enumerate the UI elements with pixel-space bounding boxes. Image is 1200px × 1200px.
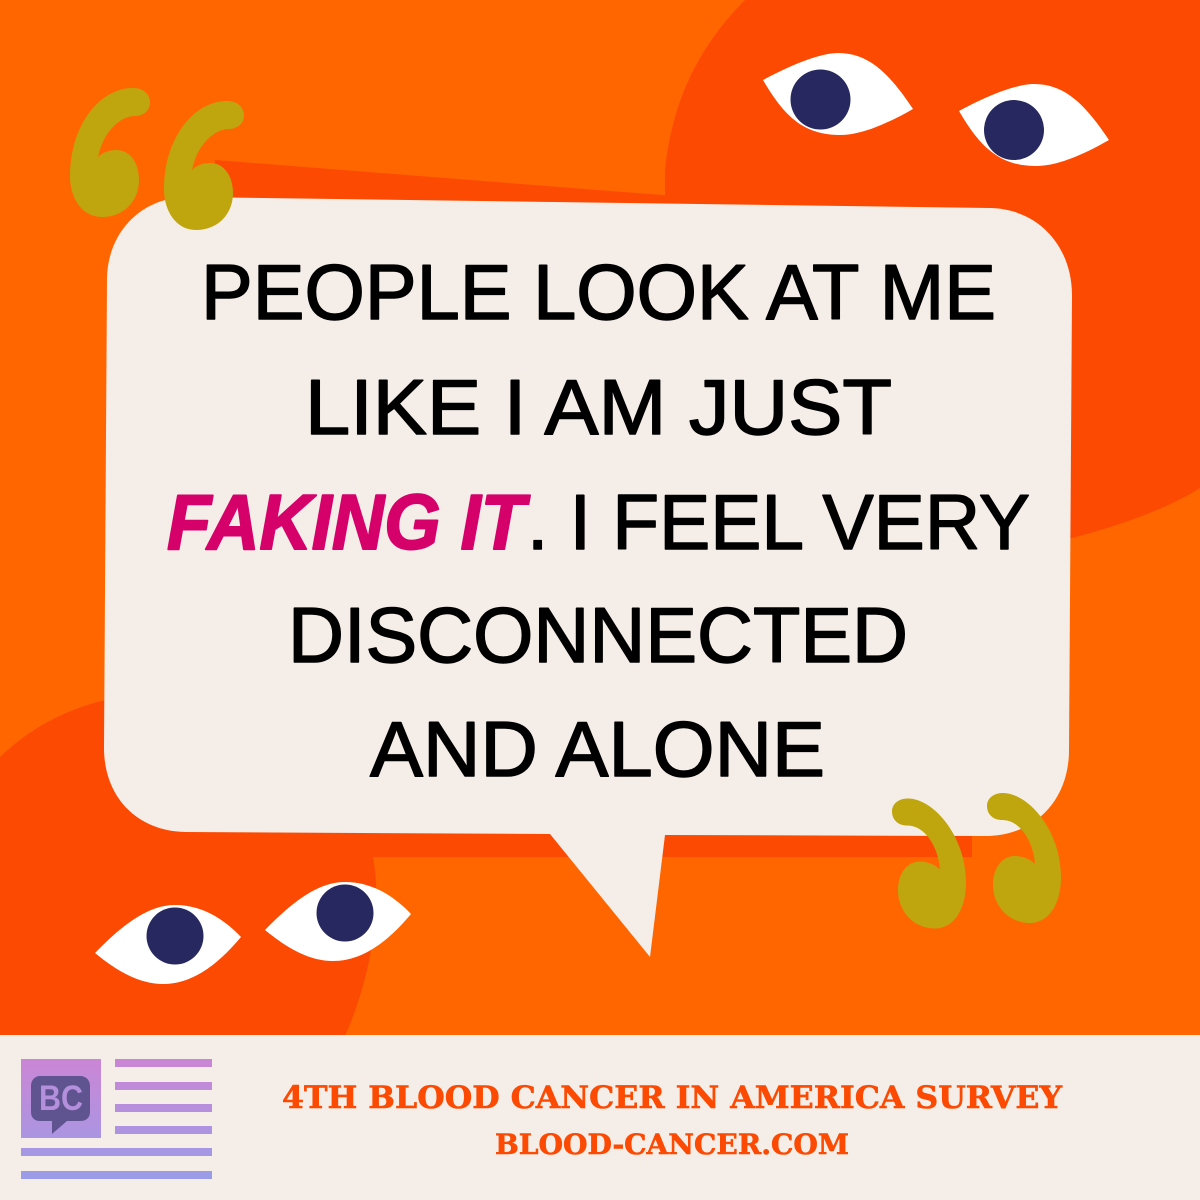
background blob: bottom left (0, 700, 376, 1036)
line 3 remainder: . I FEEL VERY (527, 478, 1030, 566)
eye: top right (959, 84, 1109, 166)
line 4: DISCONNECTED (288, 591, 908, 679)
eye: top left (763, 53, 913, 135)
closing quotation mark (892, 793, 1061, 928)
quote text (167, 248, 1030, 793)
bubble shadow: bottom strip (300, 800, 972, 857)
opening quotation mark (70, 88, 244, 230)
footer title: 4TH BLOOD CANCER IN AMERICA SURVEY (282, 1080, 1063, 1116)
emphasis: faking it: FAKING IT (167, 478, 531, 566)
footer url: BLOOD-CANCER.COM (495, 1128, 849, 1161)
icon: speech bubble (31, 1076, 90, 1134)
line 1: PEOPLE LOOK AT ME (201, 248, 996, 336)
line 2: LIKE I AM JUST (305, 363, 892, 451)
eye: bottom left (95, 905, 241, 984)
logo text lines (21, 1059, 212, 1179)
speech bubble (104, 197, 1072, 957)
eye: bottom right (265, 882, 411, 961)
line 5: AND ALONE (370, 705, 825, 793)
footer band (0, 1035, 1200, 1200)
background blob: top right (665, 0, 1200, 560)
BC mark: BC (39, 1079, 83, 1118)
logo: newspaper with BC speech bubble (21, 1059, 212, 1179)
logo square (21, 1059, 101, 1138)
bubble shadow: top strip (215, 160, 700, 240)
